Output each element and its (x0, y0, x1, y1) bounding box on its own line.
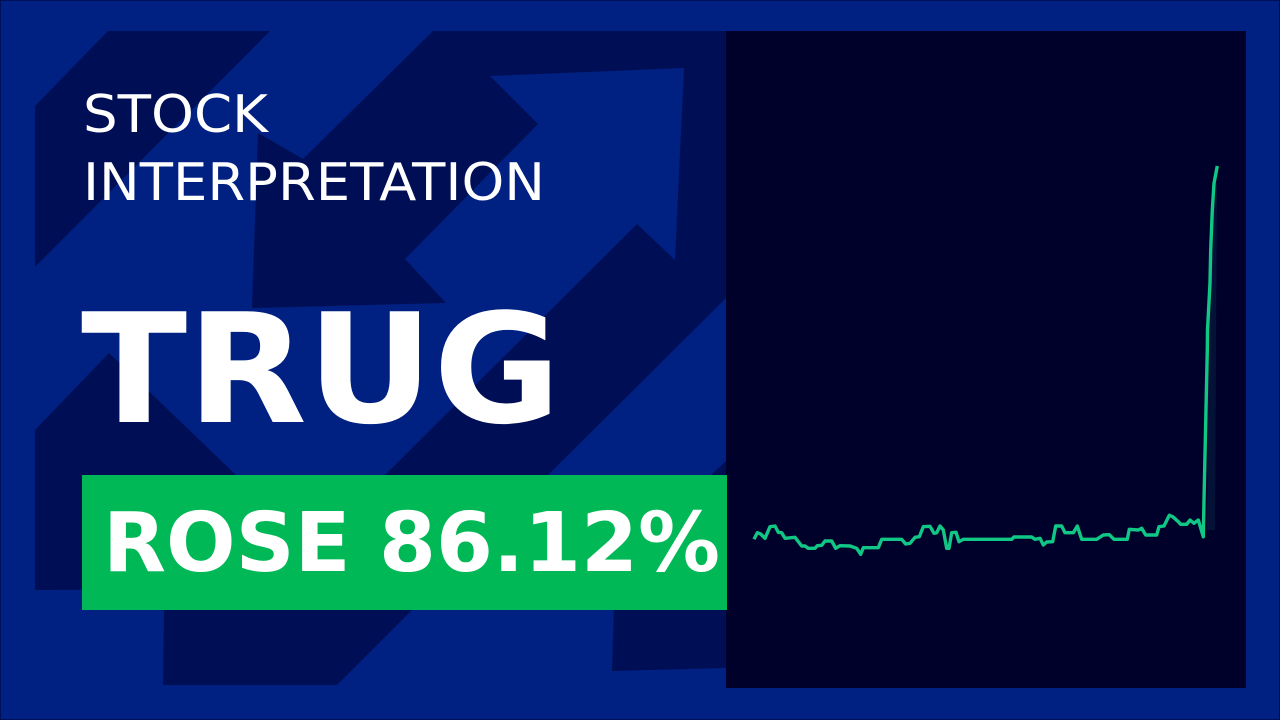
heading: stock interpretation: STOCK (83, 85, 270, 145)
heading: stock interpretation: INTERPRETATION (83, 153, 545, 213)
callout: rose percentage (82, 475, 727, 610)
ticker: TRUG: TRUG (81, 281, 561, 458)
heading: stock interpretation (83, 85, 545, 213)
line chart: price series (754, 166, 1217, 554)
callout: rose percentage: ROSE 86.12% (103, 496, 720, 591)
background arrows (35, 31, 726, 685)
chart panel (726, 31, 1246, 688)
